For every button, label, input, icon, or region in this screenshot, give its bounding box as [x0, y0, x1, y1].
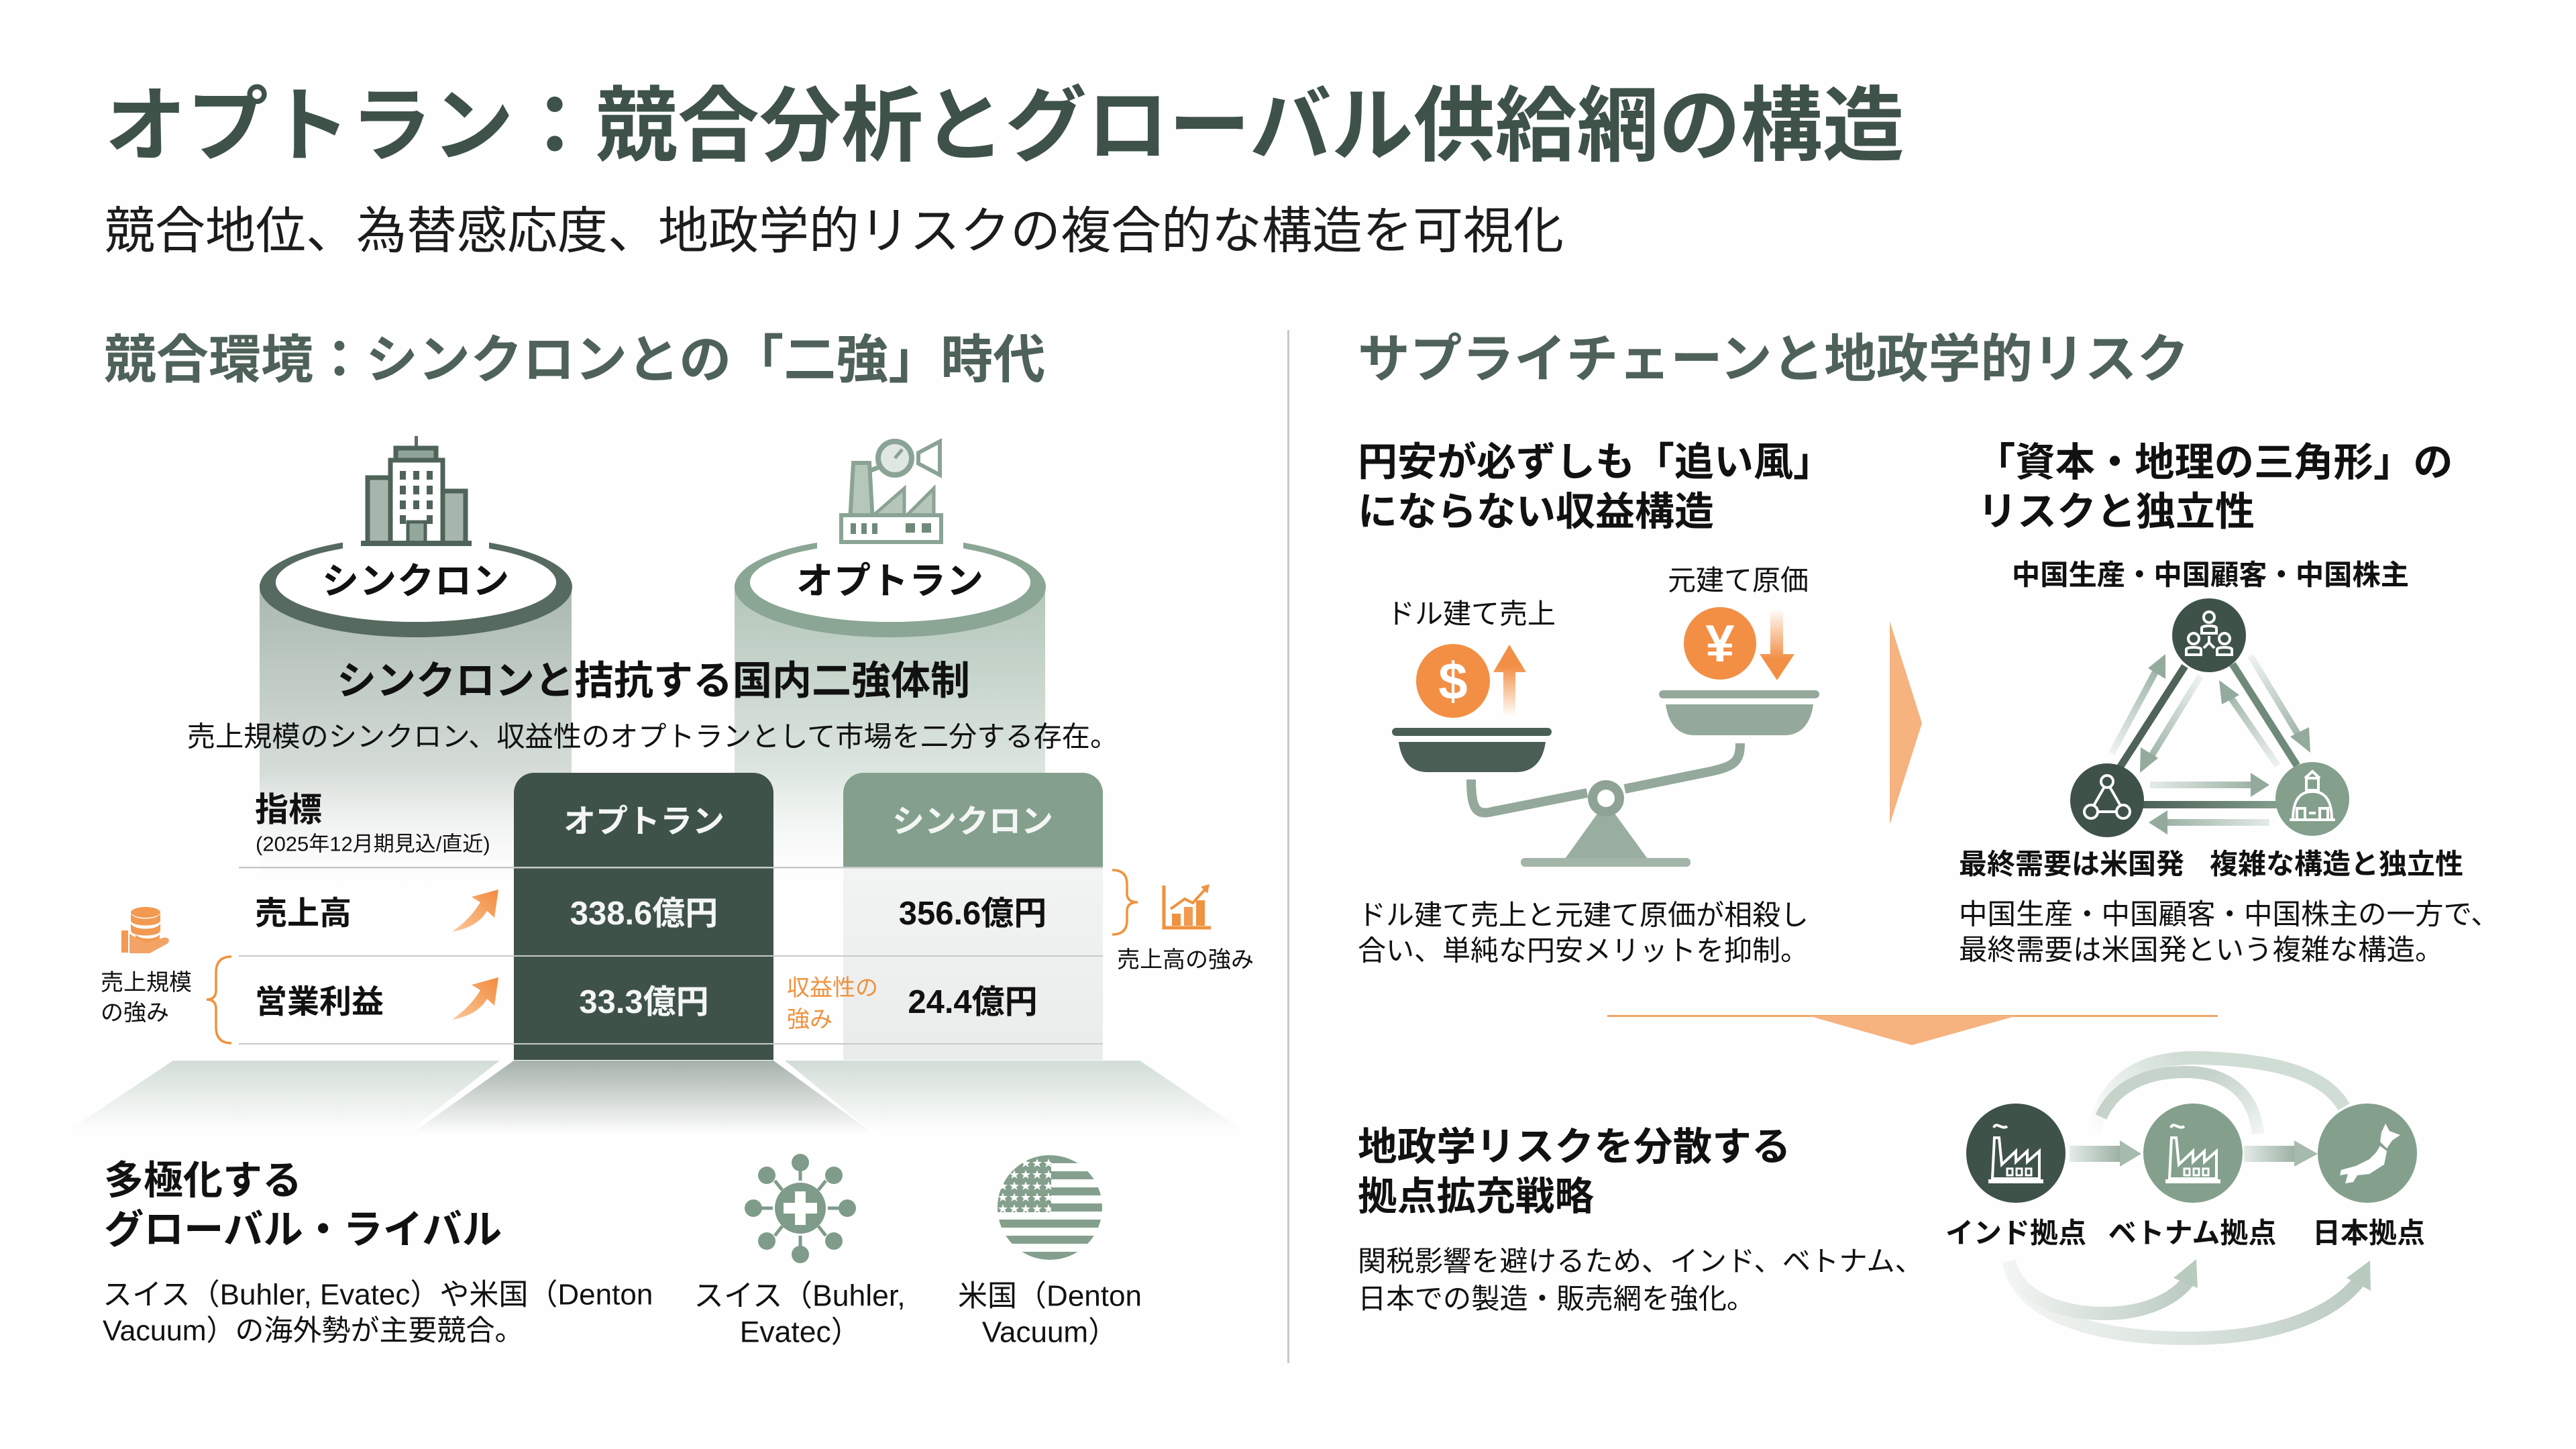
- description: currency: ドル建て売上と元建て原価が相殺し: [1358, 899, 1809, 931]
- icon: yen coin: [1684, 607, 1756, 680]
- heading: base expansion: 拠点拡充戦略: [1358, 1175, 1594, 1218]
- description: rivals: [103, 1279, 653, 1347]
- node: Japan: [2318, 1104, 2417, 1203]
- node: left: [2070, 763, 2144, 837]
- description: triangle: 最終需要は米国発という複雑な構造。: [1959, 935, 2444, 966]
- heading: global rivals: 多極化する: [104, 1159, 302, 1203]
- heading: global rivals: グローバル・ライバル: [104, 1208, 502, 1252]
- arcs: bottom: [2009, 1259, 2371, 1338]
- heading: duopoly: シンクロンと拮抗する国内二強体制: [337, 659, 970, 703]
- right pan: [1659, 690, 1819, 735]
- label: US: [958, 1280, 1142, 1348]
- label: USD sales: ドル建て売上: [1387, 598, 1556, 629]
- label: Vietnam base: ベトナム拠点: [2108, 1217, 2276, 1249]
- arrow: cost down: [1760, 608, 1794, 680]
- section heading: supply chain: サプライチェーンと地政学的リスク: [1358, 331, 2189, 388]
- brace: right: [1112, 870, 1138, 934]
- column: Optorun: 338.6億円: [570, 896, 718, 932]
- label: china: 中国生産・中国顧客・中国株主: [2012, 559, 2409, 590]
- block: global rivals: [103, 1154, 1142, 1348]
- callout: scale strength: 売上規模: [101, 970, 192, 996]
- arrow: sales up: [1493, 645, 1526, 716]
- arrow: profit up: [452, 977, 498, 1020]
- heading: global rivals: [104, 1159, 502, 1252]
- column: Synchron: 24.4億円: [908, 984, 1038, 1020]
- label: Swiss: スイス（Buhler,: [694, 1280, 906, 1312]
- row: revenue: 売上高: [255, 896, 352, 931]
- labels: final demand and structure: 最終需要は米国発: [1959, 848, 2184, 880]
- column: Optorun: オプトラン: [564, 804, 724, 840]
- arcs: top: [2094, 1058, 2344, 1134]
- row: revenue: [255, 890, 498, 932]
- icon: coins and hand: [121, 907, 169, 953]
- row: operating profit: [255, 977, 498, 1020]
- cylinder: Optorun: [735, 530, 1046, 899]
- heading: triangle: リスクと独立性: [1978, 490, 2255, 534]
- subtitle: 競合地位、為替感応度、地政学的リスクの複合的な構造を可視化: [105, 203, 1564, 259]
- description: base expansion: [1358, 1245, 1923, 1315]
- heading: triangle: 「資本・地理の三角形」の: [1976, 440, 2453, 484]
- node: India: [1966, 1104, 2065, 1203]
- column: Optorun: 33.3億円: [579, 984, 709, 1020]
- label: US: Vacuum）: [982, 1316, 1118, 1348]
- column: Optorun: [514, 773, 773, 1060]
- description: rivals: Vacuum）の海外勢が主要競合。: [103, 1315, 524, 1347]
- callout: revenue strength: [1112, 870, 1254, 973]
- panel: supply chain and geopolitical risk: [1358, 331, 2500, 1338]
- comparison table: [239, 773, 1103, 1060]
- labels: final demand and structure: 複雑な構造と独立性: [2210, 848, 2463, 880]
- description: triangle: 中国生産・中国顧客・中国株主の一方で、: [1959, 899, 2500, 931]
- column: Synchron: シンクロン: [892, 804, 1053, 840]
- description: triangle: [1959, 899, 2500, 966]
- icon: building: [361, 436, 472, 546]
- title: オプトラン：競合分析とグローバル供給網の構造: [105, 80, 1904, 172]
- column: Synchron: 356.6億円: [899, 896, 1046, 932]
- row header: metric: 指標: [255, 791, 322, 828]
- callout: revenue strength: 売上高の強み: [1117, 947, 1254, 973]
- description: currency: 合い、単純な円安メリットを抑制。: [1358, 935, 1809, 966]
- icon: factory: [841, 441, 941, 542]
- label: Japan base: 日本拠点: [2312, 1217, 2425, 1249]
- cylinder: Synchron: [260, 530, 572, 899]
- description: base expansion: 日本での製造・販売網を強化。: [1358, 1283, 1755, 1315]
- row: operating profit: 営業利益: [255, 985, 384, 1020]
- arrow: chevron right: [1890, 621, 1922, 824]
- description: rivals: スイス（Buhler, Evatec）や米国（Denton: [103, 1279, 653, 1311]
- description: duopoly: 売上規模のシンクロン、収益性のオプトランとして市場を二分する存在。: [187, 720, 1118, 753]
- icon: Swiss network: [745, 1154, 856, 1263]
- callout: profitability strength: [787, 975, 878, 1032]
- heading: yen: にならない収益構造: [1358, 490, 1714, 534]
- label: India base: インド拠点: [1945, 1217, 2086, 1249]
- floor shapes: [64, 1061, 1248, 1135]
- left pan: [1392, 728, 1552, 772]
- node: Vietnam: [2143, 1104, 2243, 1203]
- callout: profitability strength: 強み: [787, 1007, 833, 1032]
- label: US: 米国（Denton: [958, 1280, 1142, 1312]
- callout: scale strength: [101, 907, 231, 1043]
- label: Swiss: Evatec）: [740, 1316, 861, 1348]
- icon: balance scale: [1392, 690, 1819, 867]
- flow arrow: Vietnam to Japan: [2244, 1140, 2318, 1167]
- description: currency: [1358, 899, 1809, 966]
- label: Optorun: オプトラン: [796, 560, 984, 602]
- callout: scale strength: の強み: [101, 1000, 169, 1026]
- heading: yen: 円安が必ずしも「追い風」: [1358, 440, 1833, 484]
- row header: metric: [255, 791, 490, 856]
- divider: [1287, 330, 1289, 1363]
- panel: competition: [64, 330, 1254, 1348]
- row header: metric: (2025年12月期見込/直近): [256, 832, 490, 856]
- label: Swiss: [694, 1280, 906, 1348]
- section heading: competition: 競合環境：シンクロンとの「二強」時代: [104, 330, 1045, 389]
- heading: base expansion: 地政学リスクを分散する: [1358, 1126, 1791, 1169]
- brace: left: [207, 957, 231, 1043]
- arrow: revenue up: [452, 890, 498, 932]
- callout: profitability strength: 収益性の: [787, 975, 878, 1001]
- node: right: [2275, 762, 2349, 836]
- labels: final demand and structure: [1959, 848, 2463, 880]
- description: base expansion: 関税影響を避けるため、インド、ベトナム、: [1358, 1245, 1923, 1277]
- column: Synchron: [843, 773, 1103, 1060]
- icon: yen coin: ¥: [1705, 614, 1735, 673]
- block: triangle: [1959, 440, 2500, 966]
- node: top: [2172, 598, 2246, 672]
- block: base expansion: [1358, 1058, 2425, 1338]
- heading: yen: [1358, 440, 1833, 534]
- label: CNY cost: 元建て原価: [1668, 565, 1809, 596]
- heading: base expansion: [1358, 1126, 1791, 1218]
- diagram: triangle network: [2070, 598, 2349, 837]
- flow arrow: India to Vietnam: [2070, 1140, 2141, 1167]
- icon: dollar coin: [1416, 644, 1490, 718]
- label: Synchron: シンクロン: [322, 560, 510, 602]
- icon: growth chart: [1164, 884, 1211, 928]
- block: currency: [1358, 440, 1833, 966]
- arrow: divider down: [1607, 1015, 2218, 1045]
- icon: dollar coin: $: [1438, 651, 1468, 710]
- heading: triangle: [1976, 440, 2453, 534]
- icon: US flag: [998, 1155, 1102, 1260]
